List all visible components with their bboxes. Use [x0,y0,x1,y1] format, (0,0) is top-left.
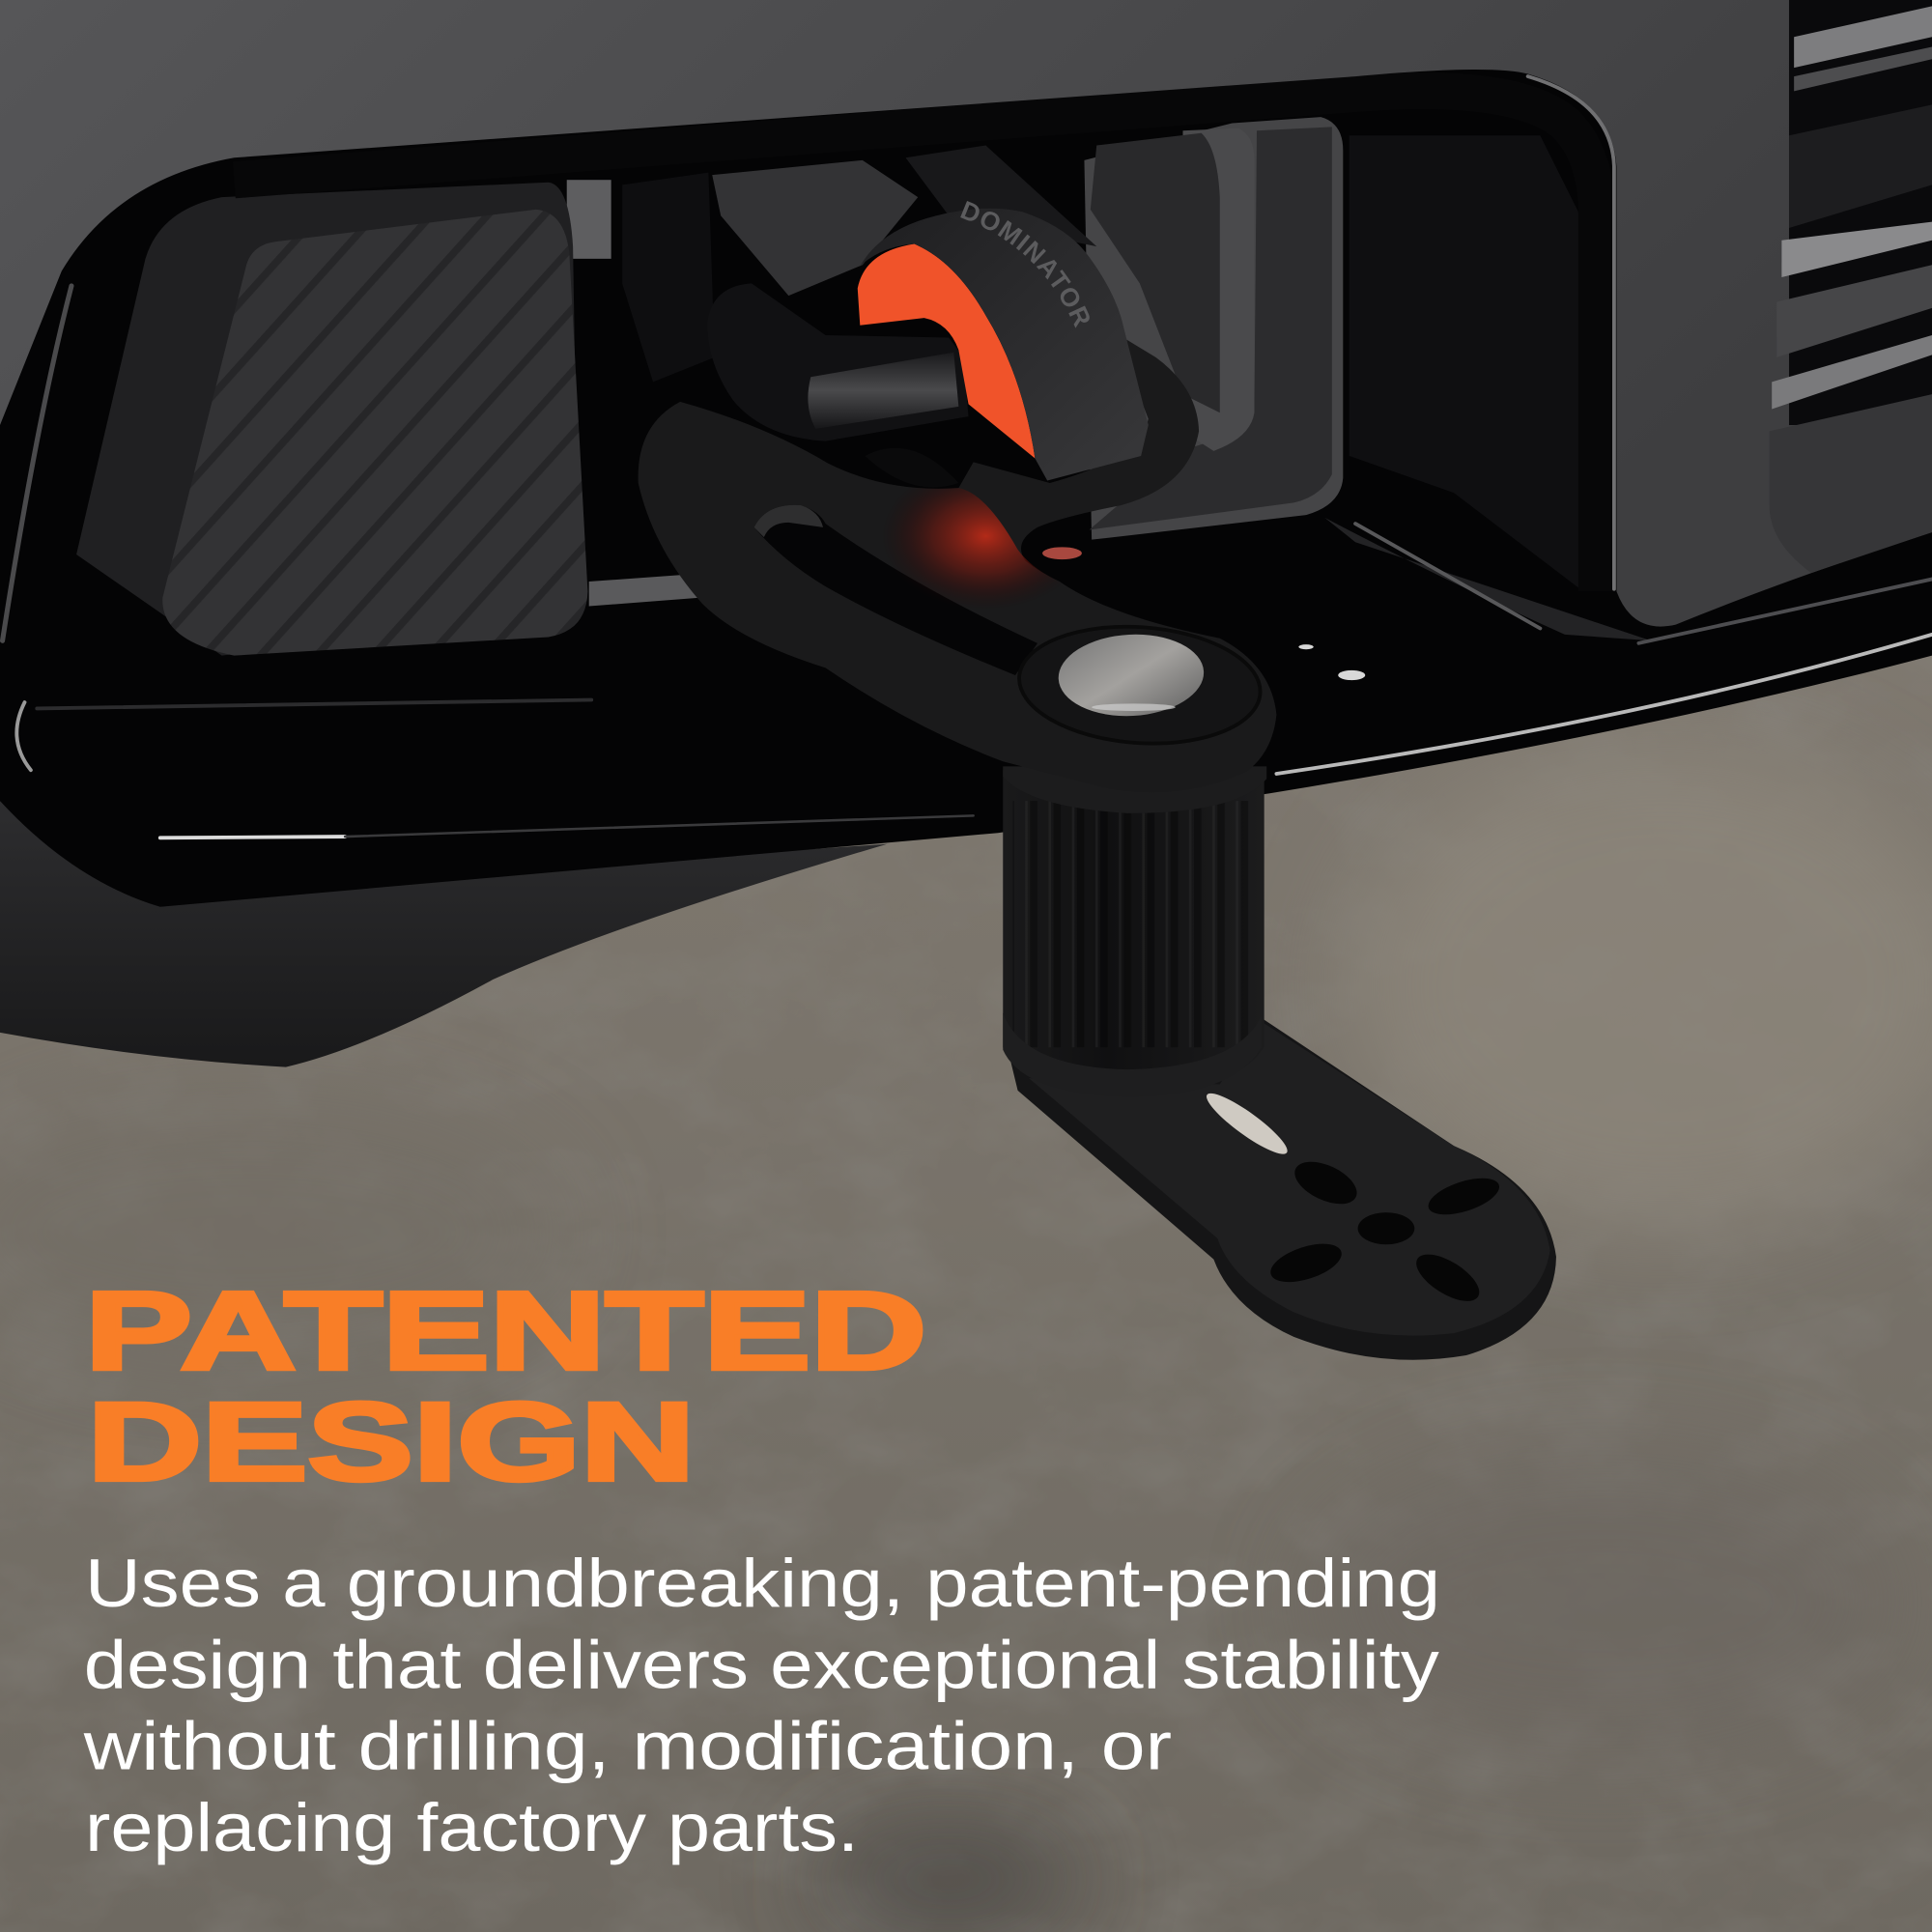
bracket recess [1090,127,1332,529]
heading: PATENTED DESIGN: DESIGN [88,1380,695,1504]
plate slot wall [754,505,823,537]
body text: replacing factory parts. [85,1789,859,1865]
shackle [707,283,969,441]
lower right panel [1770,394,1932,573]
plate holes [1266,1153,1503,1310]
center shadow bracket [622,173,715,382]
cylinder top rim [1003,766,1266,813]
heading: PATENTED DESIGN: PATENTED [85,1269,926,1393]
plate slot [1201,1086,1293,1162]
trim gloss lines [3,76,1932,838]
textured bracket block [1091,133,1220,412]
body text: without drilling, modification, or [83,1708,1172,1784]
plate hook slot [865,448,958,487]
plate long slot [754,505,1037,675]
tow mount upper arm [906,146,1096,246]
ribbed cylinder [1003,766,1266,1096]
rubber strap [861,201,1149,481]
right grille [1770,0,1932,573]
right cavity reflection [1350,135,1583,591]
rivet washer [1015,619,1264,752]
plate top surface [1029,1020,1550,1336]
lower gloss ledge [1324,518,1651,640]
heading: PATENTED DESIGN [85,1269,926,1504]
black inner trim [234,91,1597,591]
inner bracket strip [1182,128,1254,451]
pad back [76,183,579,656]
shackle bar highlight [808,353,958,429]
pad ribbed face [162,210,587,656]
upper center piece [712,160,918,296]
gray fascia with opening trim [0,0,1932,627]
shackle loop [707,283,969,441]
body text: Uses a groundbreaking, patent-pending [85,1545,1440,1621]
rubber strap: DOMINATOR [960,201,1090,328]
ribbed left pad [76,183,587,656]
body text [83,1545,1440,1865]
body text: design that delivers exceptional stability [84,1626,1439,1702]
steel rivet [1057,631,1206,720]
orange insert [858,244,1035,458]
paint specks [1298,644,1365,680]
red pin [1042,547,1082,559]
bumper opening interior [567,117,1651,640]
upper mount plate [639,332,1276,792]
cylinder flutes [1012,801,1257,1047]
red reflection [900,488,1049,597]
cylinder bottom rim [1003,1012,1262,1096]
small vertical light piece [567,180,611,259]
lower gray strip [589,562,863,607]
lower mount plate [1008,1016,1556,1360]
gloss black bumper body [0,0,1932,907]
plate body [639,332,1276,792]
lower bumper skirt [0,788,887,1067]
strap brand text [958,216,1090,370]
gray bracket frame [1084,117,1343,540]
